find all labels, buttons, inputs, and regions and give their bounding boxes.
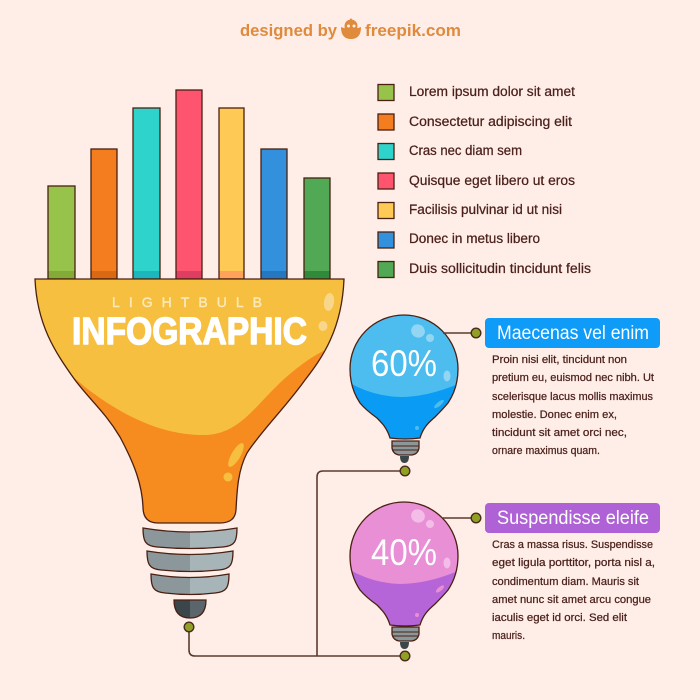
large lightbulb (30, 270, 350, 618)
purple body text: condimentum diam. Mauris sit (492, 576, 639, 588)
blue connector (443, 332, 471, 334)
bar: yellow (219, 108, 244, 279)
purple body text: amet nunc sit amet arcu congue (492, 594, 651, 606)
blue body text: tincidunt sit amet orci nec, (492, 427, 627, 439)
blue bulb glass (349, 314, 459, 440)
panel: suspendisse (485, 503, 660, 642)
bar: blue (261, 149, 287, 279)
title: infographic: INFOGRAPHIC (72, 311, 307, 353)
purple body text: Cras a massa risus. Suspendisse (492, 539, 653, 551)
connector lines (184, 466, 410, 661)
blue heading label: Maecenas vel enim (497, 323, 649, 344)
bulb tip (174, 600, 206, 618)
legend item 3: Cras nec diam sem (409, 143, 522, 158)
connector node: blue bulb (400, 466, 410, 476)
title: lightbulb: LIGHTBULB (112, 294, 262, 310)
purple bulb base (392, 627, 419, 649)
screw base (143, 528, 237, 595)
blue connector node (471, 328, 481, 338)
blue body text (492, 354, 654, 457)
purple connector node (471, 513, 481, 523)
purple lightbulb 40% (345, 497, 481, 649)
legend item 7: Duis sollicitudin tincidunt felis (409, 261, 591, 276)
credit: designed by freepik.com: designed by (240, 21, 338, 40)
bar chart (48, 90, 330, 279)
blue body text: pretium eu, euismod nec nibh. Ut (492, 372, 654, 384)
legend item 5: Facilisis pulvinar id ut nisi (409, 202, 562, 217)
purple body text: iaculis eget id orci. Sed elit (492, 612, 627, 624)
legend item 6: Donec in metus libero (409, 231, 540, 246)
purple heading label: Suspendisse eleife (497, 508, 649, 529)
panel: maecenas (485, 318, 660, 457)
value: 40%: 40% (371, 532, 437, 573)
bar: dark green (304, 178, 330, 279)
connector node: purple bulb (400, 651, 410, 661)
purple bulb highlights (409, 507, 450, 617)
blue body text: Proin nisi elit, tincidunt non (492, 354, 627, 366)
bulb highlights (224, 292, 335, 482)
connector node: large bulb (184, 622, 194, 632)
blue body text: scelerisque lacus mollis maximus (492, 391, 653, 403)
bar: pink (176, 90, 202, 279)
purple body text: eget ligula porttitor, porta nisl a, (492, 557, 655, 569)
blue body text: ornare maximus quam. (492, 445, 600, 457)
blue body text: molestie. Donec enim ex, (492, 409, 617, 421)
legend item 3 (378, 143, 522, 160)
blue bulb highlights (409, 322, 450, 430)
purple bulb glass (349, 501, 459, 626)
legend item 1: Lorem ipsum dolor sit amet (409, 84, 575, 99)
purple body text (492, 539, 655, 642)
value: 60%: 60% (371, 343, 437, 384)
bar: green (48, 186, 75, 279)
credit: designed by freepik.com: freepik.com (365, 21, 461, 40)
purple connector (443, 517, 471, 519)
legend item 4: Quisque eget libero ut eros (409, 173, 575, 188)
blue bulb base (392, 441, 419, 463)
bar: orange (91, 149, 117, 279)
purple body text: mauris. (492, 630, 525, 642)
purple heading label (485, 503, 660, 533)
bar: teal (133, 108, 160, 279)
credit: designed by freepik.com (240, 18, 461, 40)
blue lightbulb 60% (345, 310, 481, 463)
legend item 2: Consectetur adipiscing elit (409, 114, 572, 129)
legend (378, 84, 591, 278)
bulb glass (30, 270, 350, 523)
icon: freepik logo (341, 18, 361, 39)
blue heading label (485, 318, 660, 348)
